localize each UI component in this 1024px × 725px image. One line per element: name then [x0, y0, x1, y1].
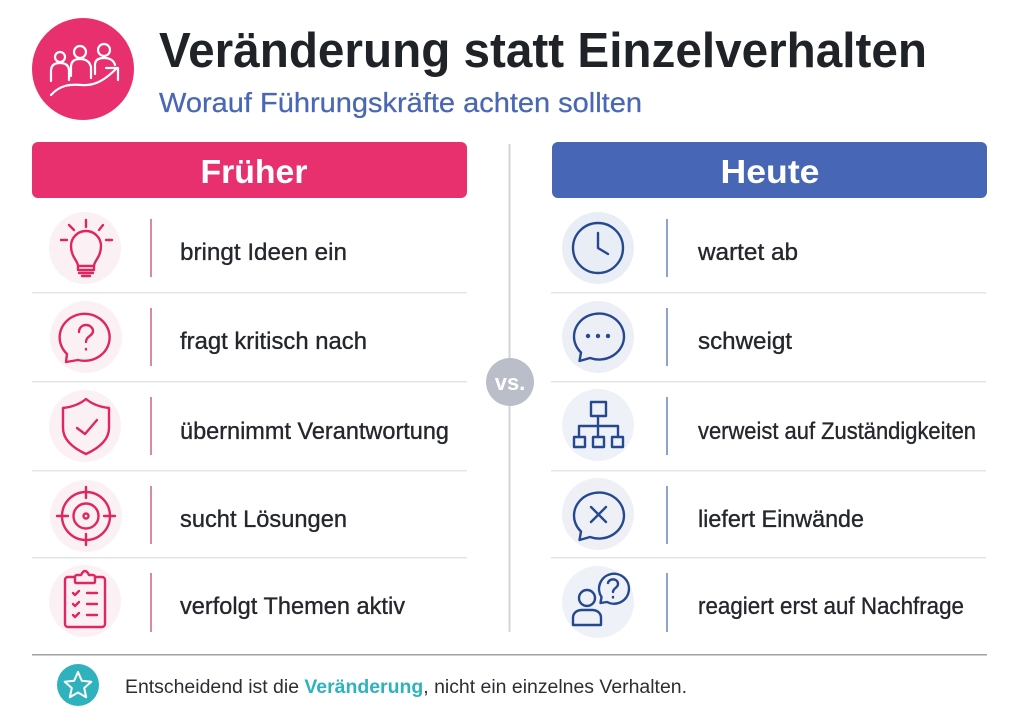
- row: liefert Einwände: [562, 478, 864, 550]
- row: verweist auf Zuständigkeiten: [562, 389, 976, 461]
- subtitle: Worauf Führungskräfte achten sollten: [159, 87, 642, 118]
- heading: Heute: Heute: [720, 153, 820, 190]
- heading: Früher: Früher: [200, 153, 308, 190]
- row: bringt Ideen ein: bringt Ideen ein: [180, 239, 347, 266]
- row: sucht Lösungen: sucht Lösungen: [180, 506, 347, 533]
- row: übernimmt Verantwortung: übernimmt Verantwortung: [180, 418, 449, 445]
- row: reagiert erst auf Nachfrage: reagiert erst auf Nachfrage: [698, 593, 964, 620]
- row: übernimmt Verantwortung: [49, 390, 449, 462]
- row: verfolgt Themen aktiv: [49, 565, 405, 637]
- row: verfolgt Themen aktiv: verfolgt Themen aktiv: [180, 593, 405, 620]
- icon: star badge: [57, 664, 99, 706]
- footer statement: Entscheidend ist die Veränderung, nicht ein einzelnes Verhalten.: [125, 677, 687, 698]
- centre divider with vs. badge: [486, 144, 534, 632]
- row: liefert Einwände: liefert Einwände: [698, 506, 864, 533]
- row: sucht Lösungen: [50, 480, 347, 552]
- heading: Früher: [32, 142, 467, 198]
- row: fragt kritisch nach: [50, 301, 367, 373]
- panel: Heute: [551, 142, 987, 638]
- row: wartet ab: [562, 212, 798, 284]
- panel: Früher: [32, 142, 467, 637]
- row: wartet ab: wartet ab: [697, 239, 798, 266]
- heading: Heute: [552, 142, 987, 198]
- row: reagiert erst auf Nachfrage: [562, 566, 964, 638]
- row: verweist auf Zuständigkeiten: verweist auf Zuständigkeiten: [698, 418, 976, 445]
- row: schweigt: schweigt: [698, 328, 792, 355]
- icon: team with rising arrow logo: [32, 18, 134, 120]
- centre divider with vs. badge: vs.: [495, 370, 525, 395]
- row: schweigt: [562, 301, 792, 373]
- row: bringt Ideen ein: [49, 212, 347, 284]
- title: Veränderung statt Einzelverhalten: [159, 24, 927, 78]
- footer rule: [32, 654, 987, 656]
- row: fragt kritisch nach: fragt kritisch nach: [180, 328, 367, 355]
